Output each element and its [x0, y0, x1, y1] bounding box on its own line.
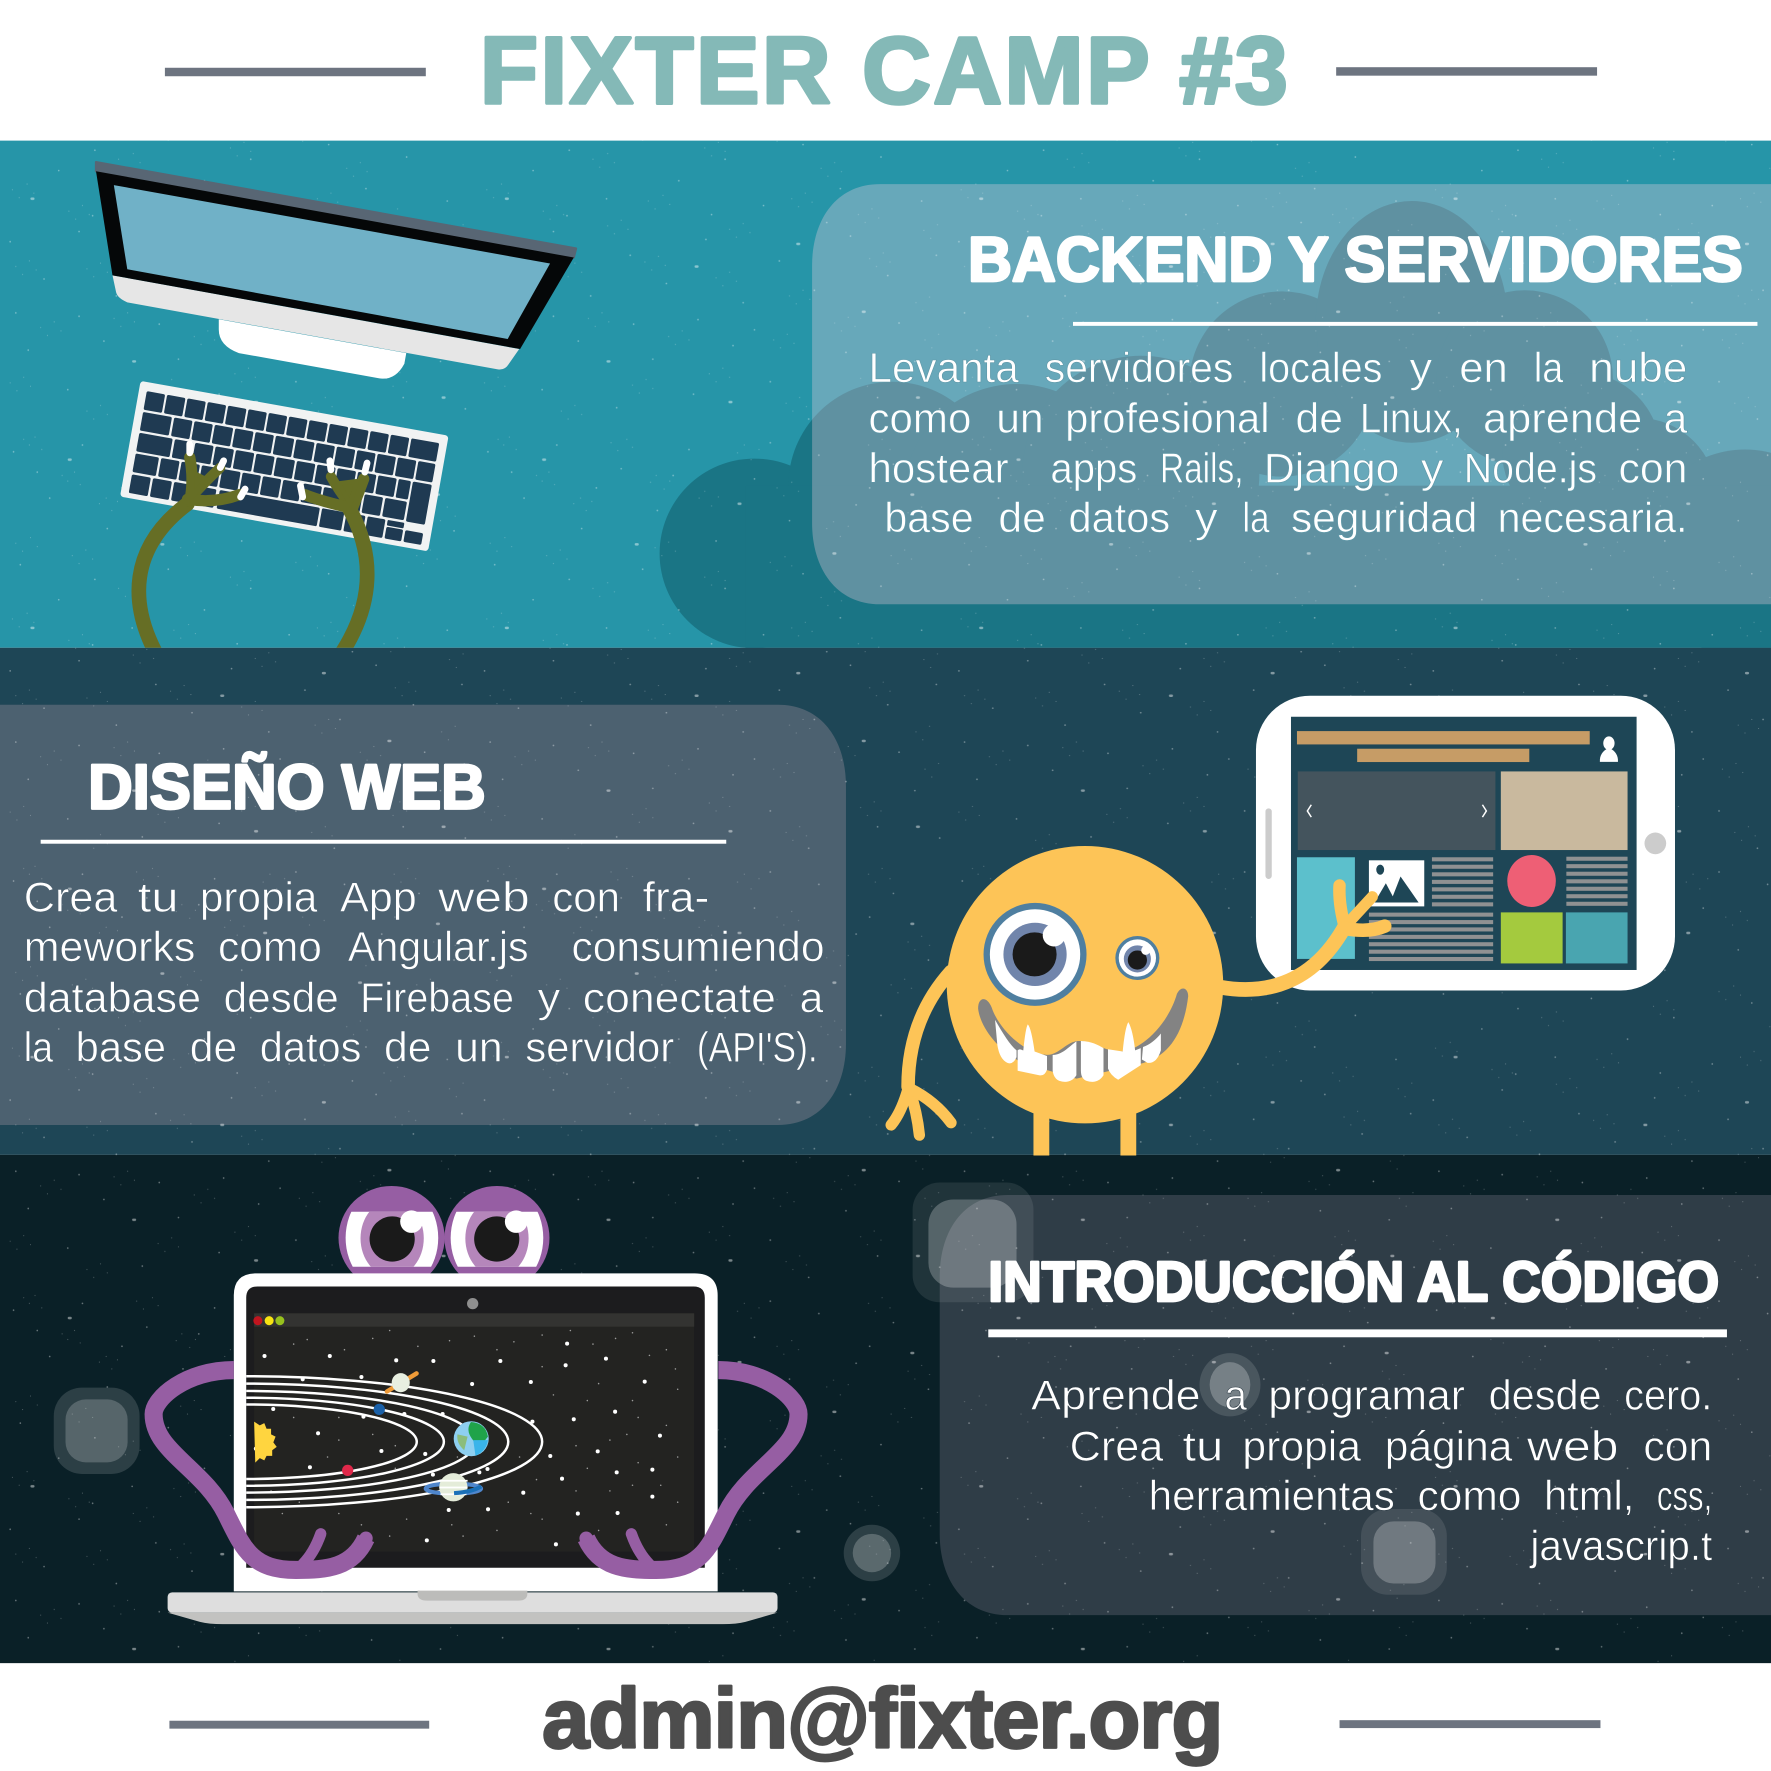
text block: código: tu: [1183, 1422, 1223, 1469]
footer line right: [1340, 1720, 1600, 1728]
text block: backend: [869, 344, 1688, 541]
ringed planet bottom: [426, 1473, 481, 1501]
text block: backend: apps: [1050, 444, 1137, 491]
illustration: tablet: [1256, 696, 1675, 991]
red planet: [342, 1465, 353, 1476]
text block: código: programar: [1268, 1372, 1465, 1419]
text block: backend: locales: [1259, 344, 1382, 391]
band: diseño web background: [0, 648, 1771, 1155]
text block: diseño web: meworks: [24, 923, 195, 970]
heading: backend: BACKEND Y SERVIDORES: [968, 225, 1743, 295]
sun: [254, 1422, 277, 1463]
text block: backend: como: [869, 395, 971, 442]
bubble: top-left of panel: [913, 1183, 1033, 1302]
text block: diseño web: de: [190, 1024, 237, 1071]
illustration: laptop: [168, 1273, 778, 1624]
text block: backend: base: [884, 494, 974, 541]
text block: diseño web: como: [218, 923, 322, 970]
text block: diseño web: App: [340, 873, 417, 920]
text block: código: html,: [1544, 1472, 1634, 1519]
bubble: lower square: [1361, 1509, 1447, 1595]
text block: diseño web: la: [24, 1024, 54, 1071]
text block: backend: y: [1410, 344, 1432, 391]
text block: backend: la: [1534, 344, 1564, 391]
text block: backend: con: [1619, 444, 1687, 491]
text block: backend: Django: [1264, 444, 1399, 491]
text block: diseño web: consumiendo: [572, 923, 825, 970]
text block: diseño web: base: [76, 1024, 166, 1071]
text block: código: [1031, 1372, 1713, 1569]
text block: diseño web: fra-: [643, 873, 709, 920]
text block: código: desde: [1489, 1372, 1602, 1419]
illustration: keyboard: [120, 381, 449, 551]
header line left: [165, 68, 426, 76]
text block: diseño web: de: [384, 1024, 431, 1071]
cloud: [660, 201, 1771, 657]
stars: [256, 1344, 660, 1544]
text block: diseño web: conectate: [583, 974, 776, 1021]
illustration: monitor: [96, 162, 576, 379]
band: backend background: [0, 141, 1771, 648]
text block: código: Crea: [1070, 1422, 1164, 1469]
text block: código: con: [1643, 1422, 1712, 1469]
text block: backend: Node.js: [1464, 444, 1597, 491]
text block: backend: profesional: [1065, 395, 1270, 442]
text block: diseño web: servidor: [525, 1024, 674, 1071]
text block: código: herramientas: [1149, 1472, 1395, 1519]
footer line left: [169, 1721, 429, 1729]
text block: diseño web: un: [455, 1024, 503, 1071]
footer email: admin@fixter.org: [542, 1670, 1223, 1765]
text block: backend: Rails,: [1160, 444, 1244, 491]
text block: backend: servidores: [1045, 344, 1233, 391]
text block: backend: a: [1664, 395, 1688, 442]
text block: backend: Linux,: [1360, 395, 1463, 442]
text block: diseño web: Angular.js: [348, 923, 529, 970]
divider: backend: [1073, 322, 1757, 326]
text block: backend: hostear: [869, 444, 1009, 491]
band: código background: [0, 1155, 1771, 1663]
laptop base: [168, 1592, 778, 1613]
text block: backend: necesaria.: [1498, 494, 1687, 541]
text block: diseño web: propia: [200, 873, 318, 920]
text block: código: javascrip.t: [1528, 1522, 1713, 1569]
illustration: yellow monster: [891, 846, 1385, 1155]
illustration: purple arms: [154, 1370, 799, 1570]
text block: backend: datos: [1068, 494, 1170, 541]
text block: código: css,: [1657, 1472, 1712, 1519]
earth: [454, 1421, 489, 1456]
text block: backend: y: [1421, 444, 1444, 491]
text block: código: como: [1417, 1472, 1521, 1519]
text block: diseño web: datos: [260, 1024, 361, 1071]
text block: backend: un: [996, 395, 1044, 442]
text block: diseño web: con: [552, 873, 620, 920]
heading: diseño web: DISEÑO WEB: [88, 752, 486, 823]
text block: código: Aprende: [1031, 1372, 1201, 1419]
divider: diseño web: [41, 840, 726, 844]
orbits: [246, 1375, 544, 1508]
bubble: circle in text: [1199, 1353, 1260, 1416]
divider: código: [988, 1329, 1727, 1337]
laptop base lower: [168, 1613, 777, 1624]
text block: código: a: [1224, 1372, 1248, 1419]
text block: diseño web: database: [24, 974, 201, 1021]
title: FIXTER CAMP #3: [480, 18, 1288, 124]
bubble: dark circle: [844, 1525, 900, 1581]
text block: código: cero.: [1624, 1372, 1712, 1419]
text block: diseño web: (API'S).: [697, 1024, 818, 1071]
panel: diseño web: [0, 705, 846, 1125]
text block: diseño web: a: [800, 974, 824, 1021]
heading: código: INTRODUCCIÓN AL CÓDIGO: [988, 1250, 1719, 1313]
text block: backend: en: [1459, 344, 1508, 391]
text block: diseño web: Crea: [24, 873, 118, 920]
text block: código: propia: [1242, 1422, 1362, 1469]
text block: backend: y: [1195, 494, 1218, 541]
text block: backend: aprende: [1483, 395, 1642, 442]
text block: diseño web: tu: [138, 873, 178, 920]
text block: backend: de: [1295, 395, 1343, 442]
text block: backend: nube: [1589, 344, 1687, 391]
text block: backend: Levanta: [869, 344, 1020, 391]
ringed planet top: [387, 1373, 417, 1392]
laptop notch: [418, 1591, 527, 1601]
text block: diseño web: y: [538, 974, 560, 1021]
text block: backend: seguridad: [1291, 494, 1477, 541]
text block: diseño web: [24, 873, 825, 1071]
small dust: [271, 1331, 678, 1536]
panel: código: [940, 1195, 1771, 1615]
text block: backend: la: [1242, 494, 1270, 541]
text block: diseño web: web: [437, 873, 530, 920]
text block: código: página: [1385, 1422, 1513, 1469]
text block: código: web: [1526, 1422, 1619, 1469]
text block: diseño web: Firebase: [360, 974, 514, 1021]
blue planet: [374, 1404, 385, 1415]
header line right: [1336, 67, 1597, 76]
bubble: left square: [54, 1388, 140, 1474]
text block: diseño web: desde: [224, 974, 339, 1021]
text block: backend: de: [998, 494, 1046, 541]
illustration: arms typing: [139, 444, 367, 657]
illustration: purple monster eyes: [338, 1186, 550, 1274]
panel: backend: [812, 184, 1771, 604]
